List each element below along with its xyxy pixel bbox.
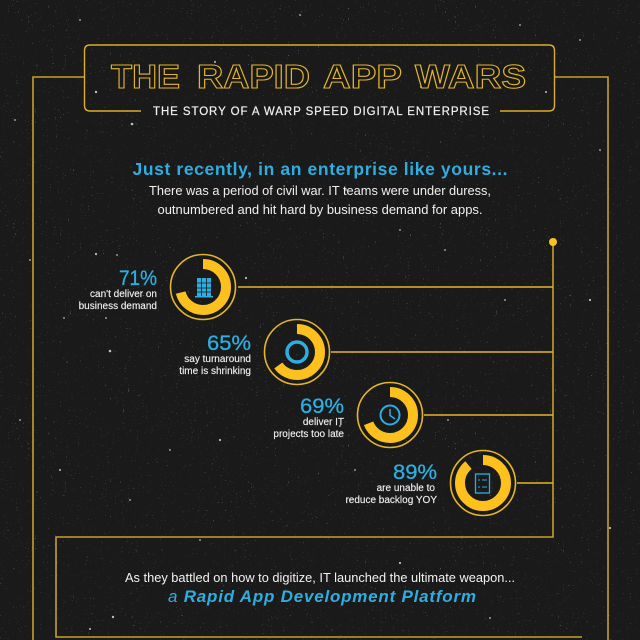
value 69%: 69% — [300, 395, 344, 418]
value 89%: 89% — [393, 461, 437, 484]
intro heading: Just recently, in an enterprise like yours... — [132, 159, 508, 179]
icon: building — [195, 278, 213, 298]
label 89%: are unable to — [377, 483, 435, 494]
label 69%: deliver IT — [303, 417, 344, 428]
label 71%: business demand — [79, 301, 157, 312]
label 71% — [79, 289, 157, 312]
title: WARS — [415, 58, 526, 95]
label 65%: say turnaround — [184, 354, 251, 365]
label 69%: projects too late — [273, 429, 344, 440]
title: RAPID — [197, 58, 310, 95]
icon: refresh ring — [287, 342, 307, 362]
intro text block — [132, 159, 508, 217]
closing text block — [125, 571, 515, 606]
stat: 65% — [179, 320, 330, 384]
subtitle: THE STORY OF A WARP SPEED DIGITAL ENTERPRISE — [153, 106, 489, 118]
connector 71% — [238, 286, 553, 288]
label 89%: reduce backlog YOY — [345, 495, 437, 506]
connector 65% — [331, 351, 553, 353]
title: THE — [111, 58, 180, 95]
donut 69% — [358, 382, 422, 448]
intro body — [149, 183, 491, 217]
platform callout: a Rapid App Development Platform — [168, 587, 476, 606]
label 71%: can't deliver on — [90, 289, 157, 300]
label 69% — [273, 417, 344, 440]
title — [111, 58, 526, 95]
donut 71% — [170, 254, 236, 320]
label 65% — [179, 354, 251, 377]
connector 69% — [424, 414, 553, 416]
icon: checklist — [476, 474, 490, 493]
timeline start dot — [549, 238, 557, 246]
timeline — [238, 238, 557, 483]
icon: clock — [380, 406, 400, 424]
label 65%: time is shrinking — [179, 366, 251, 377]
donut 65% — [264, 320, 330, 384]
stat: 89% — [345, 450, 516, 516]
title: APP — [323, 58, 402, 95]
intro body: There was a period of civil war. IT teams were under duress, — [149, 183, 491, 198]
banner frame — [84, 45, 554, 111]
frame connector lines — [33, 77, 608, 640]
stat: 71% — [79, 254, 236, 320]
value 65%: 65% — [207, 332, 251, 355]
label 89% — [345, 483, 437, 506]
closing line: As they battled on how to digitize, IT launched the ultimate weapon... — [125, 571, 515, 585]
donut 89% — [450, 450, 516, 516]
stat: 69% — [273, 382, 422, 448]
value 71%: 71% — [119, 267, 157, 290]
title banner — [84, 45, 554, 118]
intro body: outnumbered and hit hard by business demand for apps. — [158, 202, 482, 217]
connector 89% — [517, 482, 553, 484]
